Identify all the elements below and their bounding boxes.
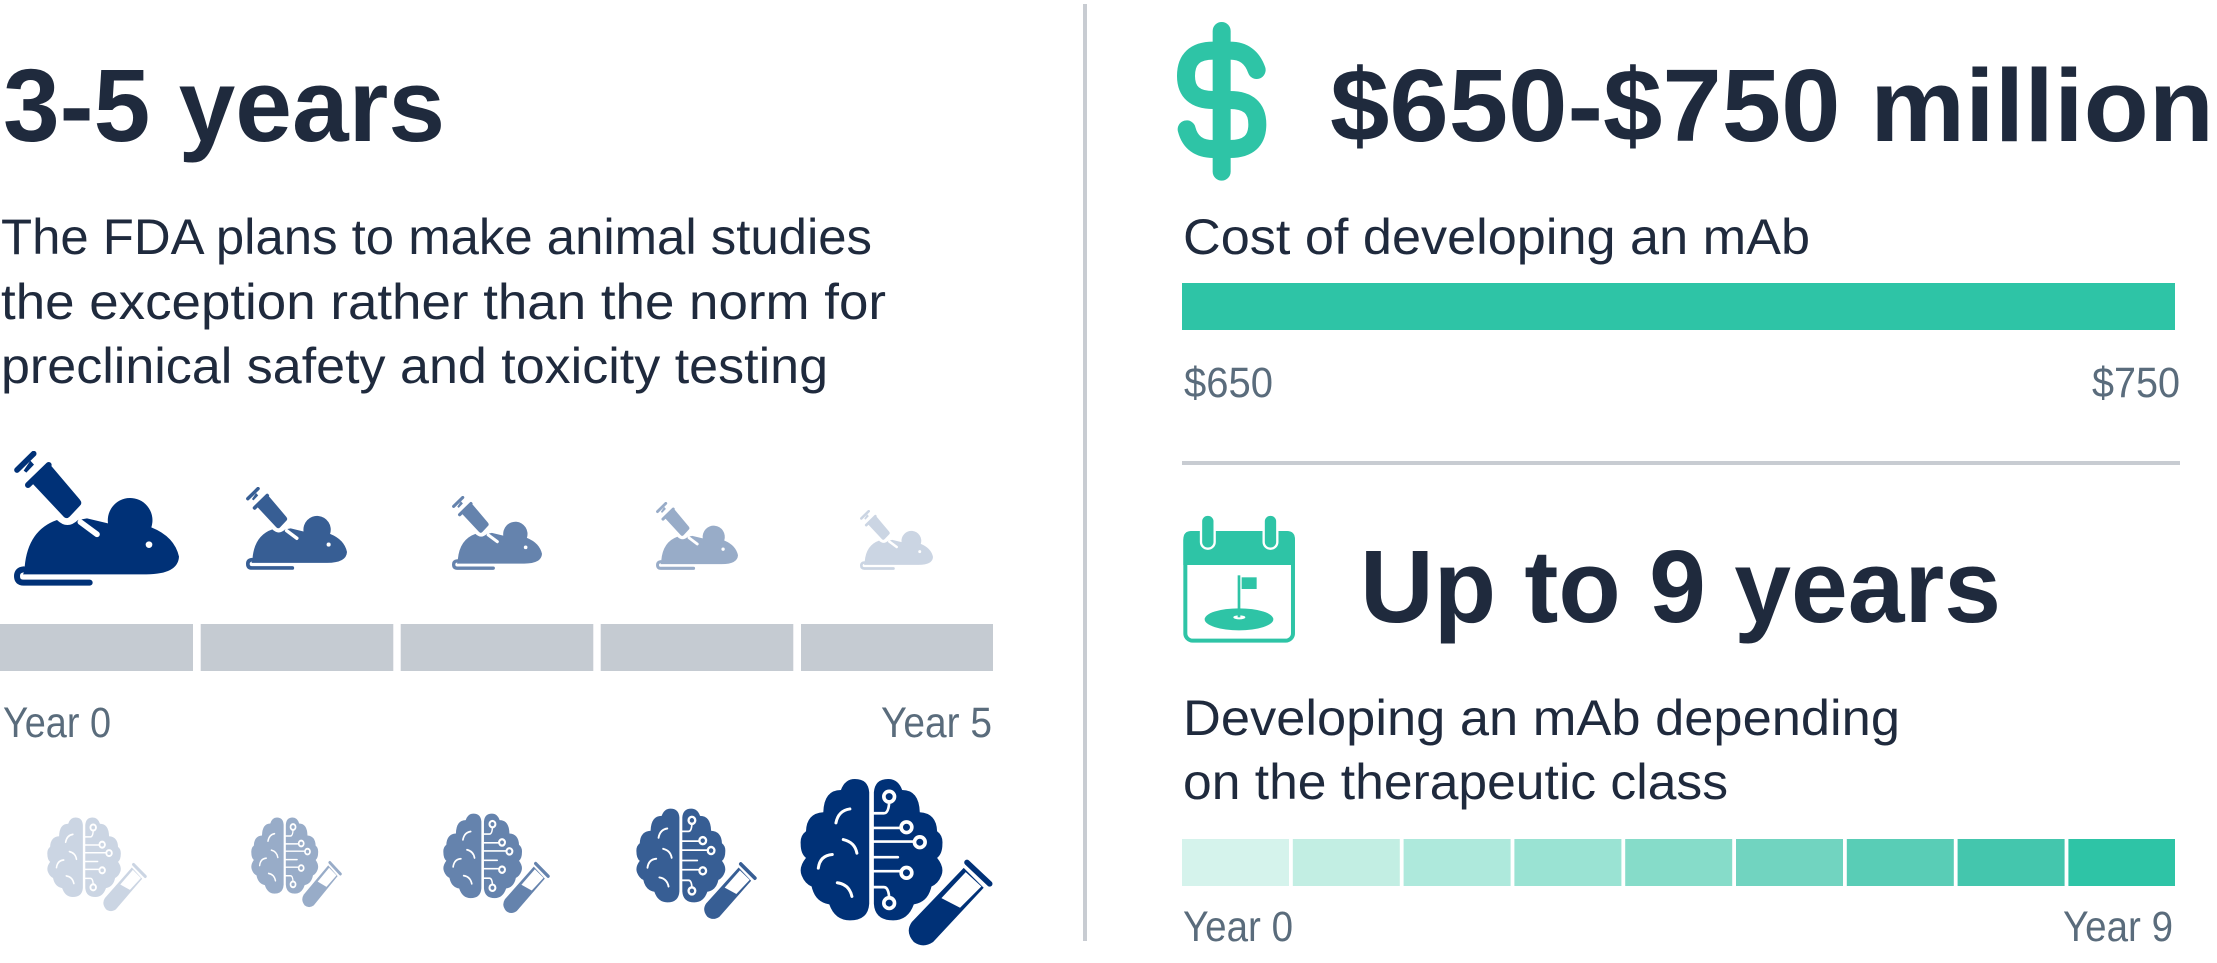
icon row: brains with test tubes	[47, 779, 990, 945]
label: Year 0: Year 0	[3, 699, 111, 747]
icon: mouse with syringe, year 3	[657, 503, 738, 568]
text: Cost of developing an mAb: Cost of developing an mAb	[1183, 209, 1810, 265]
timeline bar: five years	[0, 624, 993, 671]
panel divider	[1083, 4, 1087, 941]
text block: developing an mAb	[1183, 690, 1900, 810]
icon: brain and test tube, faintest	[47, 818, 145, 911]
icon: brain and test tube, light	[251, 818, 340, 907]
icon: brain and test tube, medium	[443, 814, 548, 913]
icon: mouse with syringe, year 2	[454, 497, 542, 568]
section divider	[1182, 461, 2180, 465]
text block: FDA plans	[1, 209, 886, 394]
icon: brain and test tube, full	[801, 779, 990, 945]
heading: Up to 9 years: Up to 9 years	[1360, 529, 2001, 644]
icon: calendar with golf flag	[1183, 515, 1295, 641]
label: Year 0: Year 0	[1183, 903, 1293, 951]
panel: animal studies timeline	[0, 48, 993, 945]
label: $750: $750	[2092, 359, 2180, 407]
label: Year 5: Year 5	[881, 699, 992, 747]
icon row: mice with syringes	[17, 454, 933, 583]
icon: mouse with syringe, full	[17, 454, 179, 583]
text block: developing an mAb: Developing an mAb depending	[1183, 690, 1900, 746]
text block: FDA plans: the exception rather than the norm for	[1, 274, 886, 330]
text block: FDA plans: The FDA plans to make animal studies	[1, 209, 872, 265]
panel: cost of developing an mAb	[1182, 31, 2214, 407]
label: $650: $650	[1184, 359, 1273, 407]
timeline bar: nine years	[1182, 839, 2175, 886]
icon: dollar sign	[1186, 31, 1257, 172]
text block: FDA plans: preclinical safety and toxicity testing	[1, 338, 828, 394]
text block: developing an mAb: on the therapeutic class	[1183, 754, 1728, 810]
icon: mouse with syringe, year 4	[861, 511, 933, 569]
heading: 3-5 years: 3-5 years	[3, 48, 445, 163]
icon: brain and test tube, strong	[636, 809, 755, 919]
bar: cost range	[1182, 283, 2175, 330]
icon: mouse with syringe, year 1	[248, 489, 347, 568]
label: Year 9: Year 9	[2063, 903, 2173, 951]
heading: $650-$750 million: $650-$750 million	[1330, 48, 2214, 163]
panel: development time	[1182, 515, 2175, 951]
